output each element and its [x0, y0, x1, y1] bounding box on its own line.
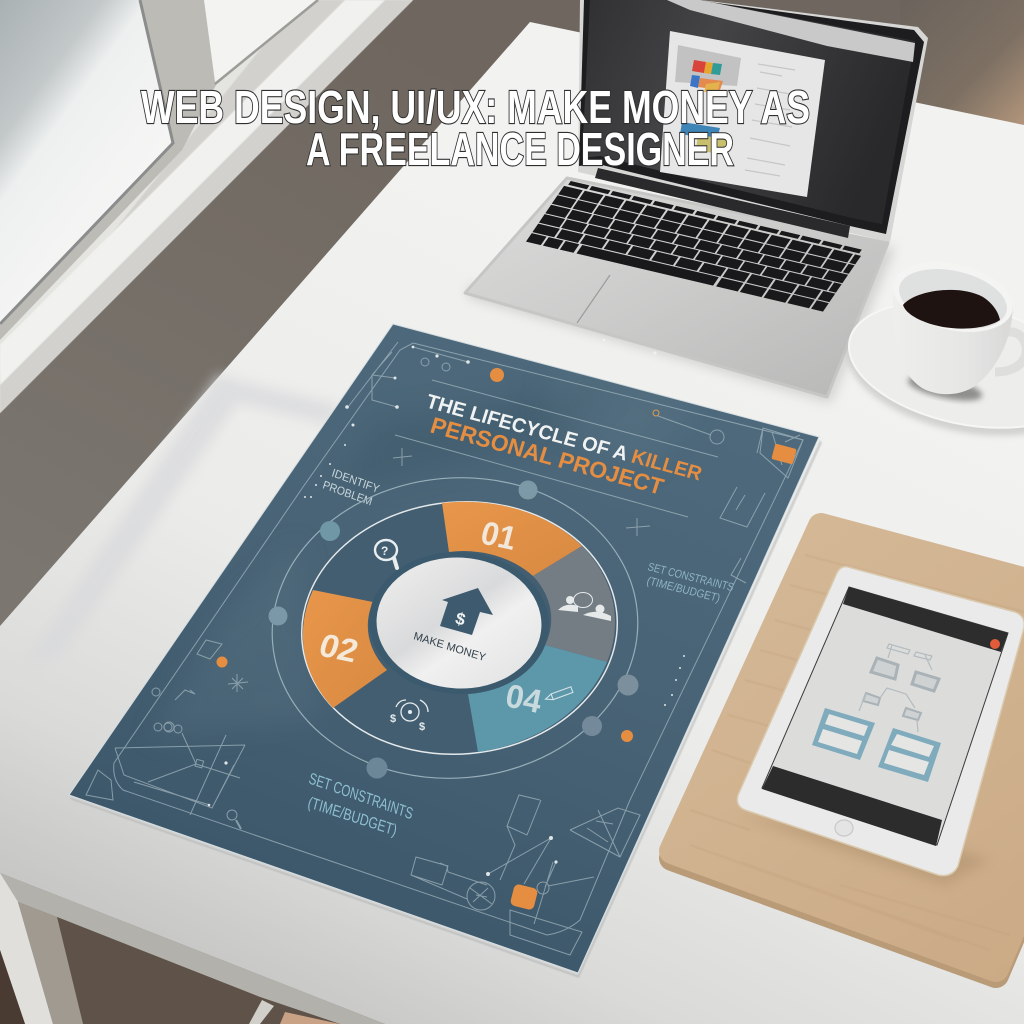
label: identify problem: PROBLEM: [321, 479, 374, 509]
saucer: [837, 283, 1024, 447]
poster: [69, 324, 822, 978]
window frame and glass: [0, 0, 413, 413]
poster title: THE LIFECYCLE OF A KILLER: [424, 391, 705, 485]
segment 04 teal: [468, 645, 607, 752]
icon: dollar gear: [390, 700, 428, 733]
wheel base: [291, 489, 628, 767]
laptop shadow: [467, 245, 895, 402]
icon: up arrow with dollar: $: [453, 609, 468, 630]
icon: up arrow with dollar: [440, 588, 493, 635]
coffee cup and saucer: [835, 251, 1024, 456]
tablet top bar: [843, 587, 1008, 652]
label: identify problem: IDENTIFY: [330, 467, 381, 496]
icon: people with speech bubble: [558, 592, 611, 621]
segment 02: [303, 590, 387, 708]
centre ring: [365, 547, 553, 699]
icon: dollar gear: $: [390, 713, 396, 725]
laptop base: [465, 178, 888, 397]
laptop lid and screen: [578, 0, 928, 242]
icon: dollar gear: $: [419, 721, 425, 733]
tablet flowchart: [812, 644, 941, 782]
poster title: PERSONAL PROJECT: [427, 412, 667, 500]
icon: pencil: [545, 687, 573, 702]
orbit nodes: [268, 480, 638, 778]
wooden board: [672, 526, 1024, 975]
coffee: [903, 290, 1000, 329]
orbit ring: [260, 463, 650, 793]
page title: A FREELANCE DESIGNER: [306, 123, 734, 175]
tablet home button: [835, 820, 853, 836]
application document: [660, 31, 825, 197]
cup handle: [995, 332, 1024, 372]
centre disc: [373, 553, 545, 693]
window light shadows on table: [22, 374, 340, 668]
label: identify problem: [321, 467, 381, 509]
dark background top right: [900, 0, 1024, 130]
cup inner: [893, 259, 1013, 339]
laptop front indicator dots: [603, 339, 656, 354]
label: make money: MAKE MONEY: [412, 630, 488, 664]
large blue boxes: [812, 708, 941, 782]
tablet bottom bar: [762, 766, 942, 846]
page title: WEB DESIGN, UI/UX: MAKE MONEY AS: [141, 81, 810, 133]
saucer shadow: [835, 288, 1024, 456]
tablet shadow: [737, 815, 990, 885]
blueprint line work: [86, 342, 803, 955]
blueprint nodes: [208, 346, 685, 876]
cup foot shadow: [906, 370, 984, 406]
label: set constraints right: (TIME/BUDGET): [645, 575, 722, 605]
number 04: 04: [503, 676, 546, 720]
poster shadow: [69, 440, 822, 978]
tablet: [737, 567, 1024, 885]
tablet screen: [762, 587, 1008, 845]
process wheel: [291, 489, 628, 767]
decorative orange shapes: [216, 368, 797, 911]
icon: magnifier with question mark: ?: [381, 544, 388, 558]
cup body: [893, 295, 1013, 394]
hinge: [595, 168, 850, 238]
trackpad: [577, 275, 610, 323]
page title: [141, 81, 810, 175]
number 01: 01: [477, 514, 520, 557]
label: set constraints lower: (TIME/BUDGET): [306, 794, 399, 840]
board edge: [672, 530, 1024, 975]
poster sheet: [69, 324, 819, 973]
connectors: [859, 644, 932, 732]
keyboard: [529, 182, 863, 307]
poster lighting: [150, 340, 700, 740]
tablet body: [737, 567, 1024, 876]
segment 03 grey: [533, 546, 615, 662]
board top: [672, 526, 1024, 969]
number 02: 02: [315, 626, 363, 669]
segment 01: [442, 502, 582, 576]
cup rim: [886, 251, 1020, 343]
laptop: [465, 0, 928, 402]
label: set constraints lower: SET CONSTRAINTS: [307, 770, 415, 823]
small grey boxes: [863, 658, 939, 720]
tablet avatar: [990, 639, 1000, 649]
table front edge and legs: [0, 873, 385, 1024]
icon: magnifier with question mark: [375, 540, 397, 568]
label: set constraints right: SET CONSTRAINTS: [646, 561, 735, 594]
